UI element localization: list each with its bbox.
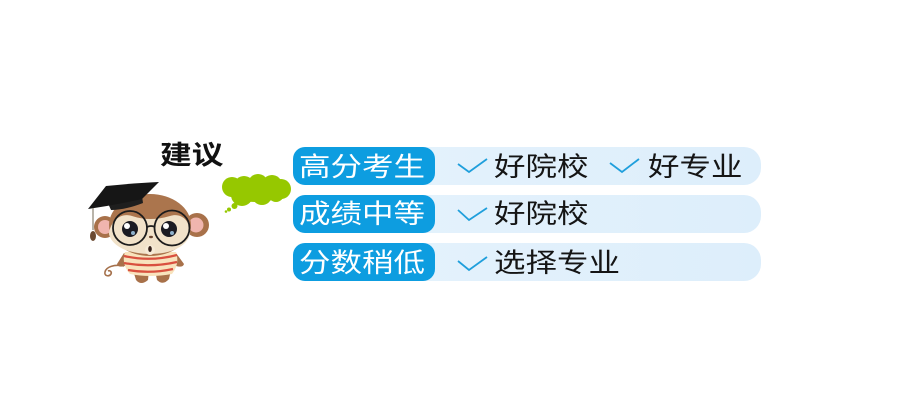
label text: 成绩中等 bbox=[299, 199, 425, 229]
check icon bbox=[458, 257, 487, 270]
row background bbox=[293, 147, 761, 185]
option text: 好专业 bbox=[648, 152, 743, 182]
monkey face bbox=[109, 215, 190, 254]
label pill bbox=[293, 147, 435, 185]
check icon bbox=[610, 159, 639, 172]
label text: 分数稍低 bbox=[299, 248, 425, 278]
icon: monkey mascot with graduation cap bbox=[88, 182, 209, 283]
monkey tail bbox=[105, 265, 124, 276]
monkey feet bbox=[133, 270, 171, 283]
row: medium scores bbox=[293, 195, 761, 233]
check icon bbox=[458, 159, 487, 172]
label pill bbox=[293, 243, 435, 281]
row background bbox=[293, 243, 761, 281]
option text: 选择专业 bbox=[494, 248, 620, 278]
option text: 好院校 bbox=[494, 199, 589, 229]
heading: advice: 建议 bbox=[160, 141, 223, 170]
label text: 高分考生 bbox=[299, 152, 425, 182]
monkey glasses bbox=[113, 210, 190, 246]
graduation cap bbox=[88, 182, 159, 241]
row: lower scores bbox=[293, 243, 761, 281]
monkey ears bbox=[94, 213, 209, 238]
monkey nose and mouth bbox=[145, 236, 155, 255]
monkey striped shirt bbox=[124, 252, 177, 276]
icon: green thought bubble bbox=[222, 174, 291, 213]
monkey eyes bbox=[122, 221, 177, 237]
row background bbox=[293, 195, 761, 233]
option text: 好院校 bbox=[494, 152, 589, 182]
monkey arms bbox=[117, 253, 184, 267]
row: high scores bbox=[293, 147, 761, 185]
label pill bbox=[293, 195, 435, 233]
monkey head bbox=[109, 194, 191, 256]
check icon bbox=[458, 208, 487, 220]
